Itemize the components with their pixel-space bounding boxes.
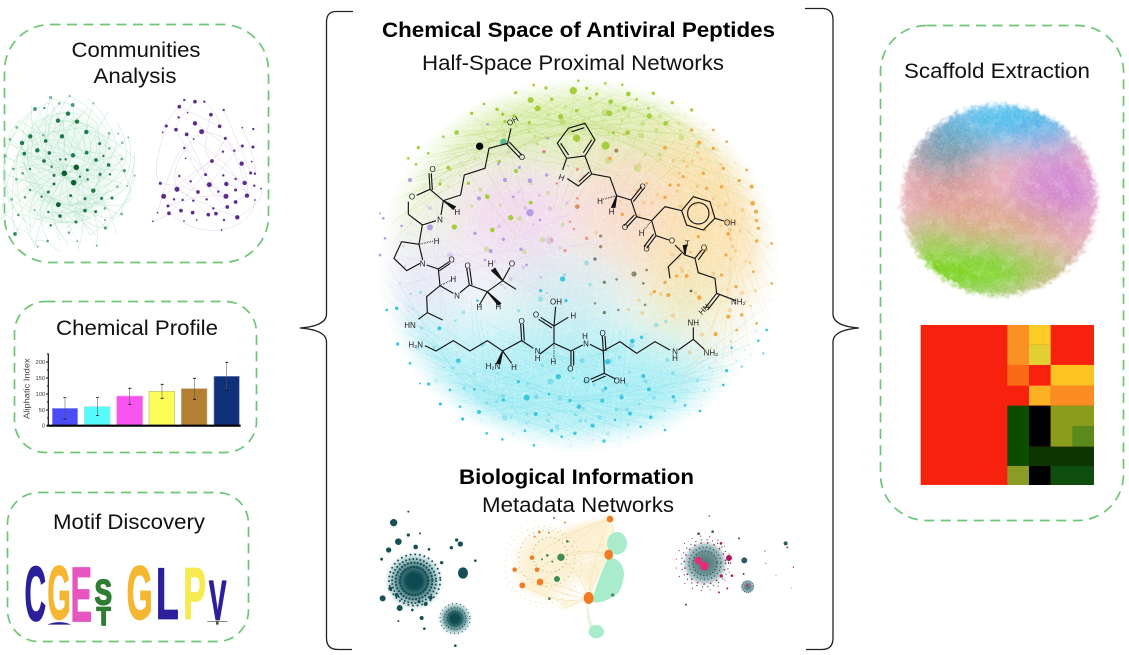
molecule: antiviral peptide structure: H: [570, 312, 576, 321]
molecule: antiviral peptide structure: OH: [614, 376, 626, 385]
molecule: antiviral peptide structure: O: [622, 223, 628, 232]
sequence logo: E: [71, 552, 92, 638]
molecule: antiviral peptide structure: HN: [404, 321, 416, 330]
sequence logo: P: [183, 553, 206, 634]
panel: scaffold extraction: [880, 26, 1124, 520]
node: teal highlight: [500, 139, 507, 145]
molecule: antiviral peptide structure: N: [454, 291, 460, 300]
molecule: antiviral peptide structure: OH: [505, 114, 520, 128]
molecule: antiviral peptide structure: H: [450, 275, 456, 284]
sequence logo: S: [95, 573, 112, 612]
molecule: antiviral peptide structure: N: [672, 347, 678, 356]
molecule: antiviral peptide structure: H: [476, 303, 482, 312]
network: antiviral peptides chemical space: [378, 79, 778, 450]
molecule: antiviral peptide structure: N: [535, 347, 541, 356]
molecule: antiviral peptide structure: H: [535, 354, 541, 363]
molecule: antiviral peptide structure: O: [584, 376, 590, 385]
molecule: antiviral peptide structure: NH₂: [704, 349, 718, 358]
scaffold network sphere: [896, 100, 1101, 302]
molecule: antiviral peptide structure: O: [519, 153, 525, 162]
molecule: antiviral peptide structure: O: [644, 244, 650, 253]
heading: communities analysis: Communities: [72, 39, 200, 62]
panel border: [880, 26, 1124, 520]
molecule: antiviral peptide structure: H: [557, 172, 566, 183]
sequence logo: C: [25, 551, 46, 637]
panel border: [4, 24, 268, 262]
molecule: antiviral peptide structure: O: [409, 192, 415, 201]
subheading: half-space proximal networks: Half-Space Proximal Networks: [422, 52, 724, 75]
edges: proximal network chords: [380, 81, 778, 448]
sequence logo: G: [47, 551, 71, 635]
bar chart: aliphatic index: 100: [36, 392, 45, 398]
molecule: antiviral peptide structure: O: [533, 311, 539, 320]
heading: communities analysis: Analysis: [94, 65, 176, 88]
molecule: antiviral peptide structure: H: [672, 354, 678, 363]
molecule: antiviral peptide structure: NH₂: [731, 298, 746, 307]
panel border: [14, 302, 256, 452]
panel: motif discovery: V: [209, 568, 226, 631]
panel: chemical profile: [14, 302, 256, 452]
network: teal and magenta metadata: [676, 515, 794, 606]
molecule: antiviral peptide structure: O: [640, 183, 646, 192]
molecule: antiviral peptide structure: H: [550, 357, 556, 366]
molecule: antiviral peptide structure: NH: [688, 318, 699, 327]
heading: communities analysis: [72, 39, 200, 88]
molecule: antiviral peptide structure: HN: [697, 302, 712, 317]
heading: biological information: Biological Information: [459, 466, 694, 489]
molecule: antiviral peptide structure: H: [495, 302, 501, 311]
molecule: antiviral peptide structure: T: [685, 239, 690, 248]
molecule: antiviral peptide structure: H: [582, 332, 588, 341]
dots: green cluster: [407, 80, 693, 232]
molecule: antiviral peptide structure: O: [669, 236, 675, 245]
molecule: antiviral peptide structure: H: [488, 260, 494, 269]
molecule: antiviral peptide structure: H₂N: [486, 362, 501, 371]
molecule: antiviral peptide structure: OH: [550, 298, 562, 307]
network: teal metadata clusters: [380, 511, 477, 647]
bar chart: aliphatic index: 200: [36, 360, 45, 366]
molecule: antiviral peptide structure: O: [430, 165, 436, 174]
bracket: right: [805, 8, 859, 650]
bar chart: aliphatic index: 0: [42, 424, 45, 430]
bracket: left: [300, 12, 353, 650]
heading: chemical space of antiviral peptides: Chemical Space of Antiviral Peptides: [382, 19, 775, 42]
sequence logo: L: [156, 553, 179, 634]
panel border: [8, 492, 248, 642]
molecule: antiviral peptide structure: H: [511, 363, 517, 372]
panel: biological information: [380, 466, 794, 647]
bar chart: aliphatic index: 50: [39, 408, 45, 414]
bar chart: aliphatic index: Aliphatic Index: [22, 358, 31, 419]
molecule: antiviral peptide structure: O: [600, 329, 606, 338]
dots: purple cluster: [379, 123, 549, 266]
sequence logo: [25, 551, 227, 638]
molecule: antiviral peptide structure: O: [509, 260, 515, 269]
molecule: antiviral peptide structure: O: [567, 365, 573, 374]
dots: secondary scattered nodes: [398, 104, 772, 448]
dots: cyan cluster: [386, 277, 768, 446]
molecule: antiviral peptide structure: H: [597, 197, 603, 206]
heading: scaffold extraction: Scaffold Extraction: [904, 60, 1090, 83]
molecule: antiviral peptide structure: O: [519, 317, 525, 326]
network: orange and mint metadata: [502, 516, 627, 638]
panel: communities analysis: [0, 24, 268, 262]
molecule: antiviral peptide structure: N: [437, 216, 443, 225]
molecule: antiviral peptide structure: N: [420, 259, 426, 268]
heading: chemical profile: Chemical Profile: [56, 317, 218, 340]
molecule: antiviral peptide structure: H: [434, 237, 440, 246]
sequence logo: T: [97, 604, 111, 631]
molecule: antiviral peptide structure: H: [609, 208, 615, 217]
molecule: antiviral peptide structure: OH: [724, 218, 736, 227]
panel: motif discovery: [8, 492, 248, 642]
subheading: metadata networks: Metadata Networks: [482, 494, 674, 517]
network: purple community: [152, 99, 262, 231]
bar chart: aliphatic index: [22, 353, 241, 430]
bar chart: aliphatic index: 150: [36, 376, 45, 382]
molecule: antiviral peptide structure: O: [701, 244, 707, 253]
molecule: antiviral peptide structure: O: [449, 256, 455, 265]
dots: pink and grey transition nodes: [542, 149, 692, 314]
dots: orange cluster: [609, 129, 773, 336]
molecule: antiviral peptide structure: H: [454, 208, 460, 217]
molecule: antiviral peptide structure: N: [583, 340, 589, 349]
heading: motif discovery: Motif Discovery: [53, 511, 206, 534]
molecule: antiviral peptide structure: H₂N: [408, 340, 423, 349]
sequence logo: G: [127, 551, 153, 635]
molecule: antiviral peptide structure: O: [465, 261, 471, 270]
heatmap: [921, 325, 1094, 485]
network: green community: [0, 81, 153, 261]
molecule: antiviral peptide structure: H: [639, 229, 645, 238]
molecule: antiviral peptide structure: [394, 114, 746, 385]
panel: chemical space: [378, 22, 778, 450]
